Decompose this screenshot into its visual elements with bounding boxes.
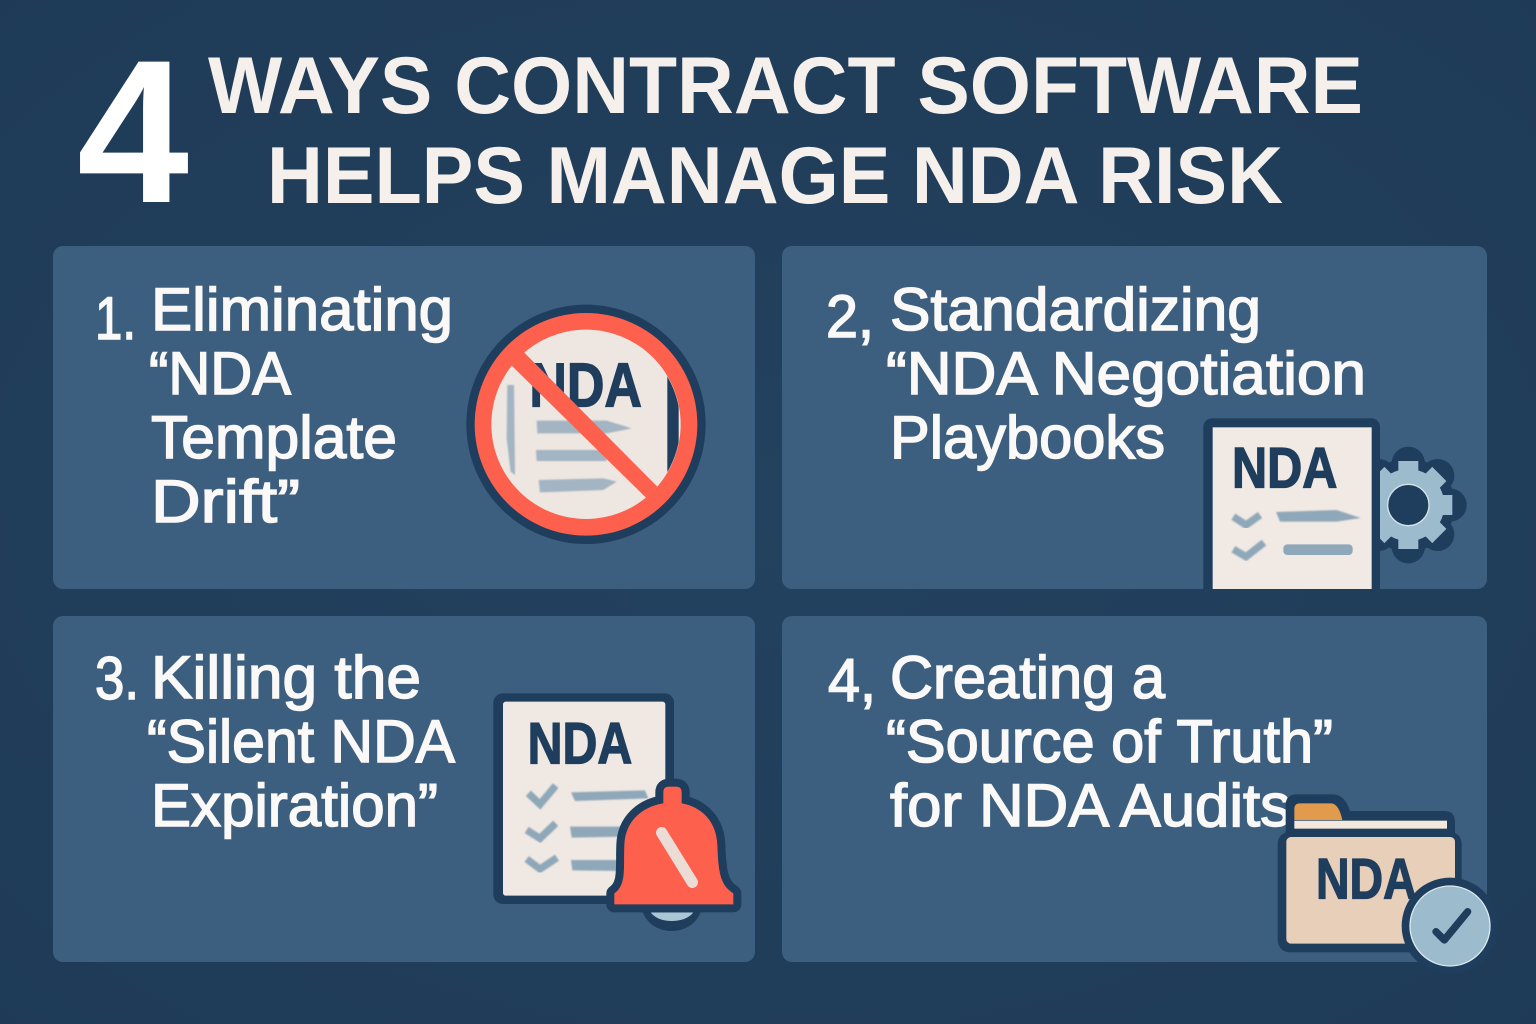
check badge [1402,878,1498,974]
bell clapper [642,908,702,931]
icon: NDA playbook document with gear [1203,418,1455,598]
panel 3 heading: Expiration” [151,772,438,839]
title numeral: 4 [77,18,189,246]
panel 2 heading: “NDA Negotiation [886,340,1366,407]
number 1: 1. [95,285,136,352]
panel 3 heading [147,644,455,839]
panel 4 heading: for NDA Audits [890,772,1291,839]
title line 1: WAYS CONTRACT SOFTWARE [208,41,1363,131]
panel 4 heading [886,644,1333,839]
panel 1 heading: Template [151,404,397,471]
panel 1 heading: Drift” [151,468,300,535]
panel 2 heading: Standardizing [890,276,1261,343]
panel 4 heading: Creating a [890,644,1166,711]
panel 3: killing the silent NDA expiration [53,616,755,962]
panel 1 heading: Eliminating [151,276,453,343]
icon: prohibited NDA document: NDA [529,352,642,421]
panel 2 heading [886,276,1366,471]
icon: NDA playbook document with gear: NDA [1232,437,1337,501]
number 3: 3. [95,645,139,712]
gear [1362,458,1455,552]
panel 2: standardizing NDA negotiation playbooks [782,246,1487,598]
panel 1: eliminating NDA template drift [53,246,755,589]
panel 2 heading: Playbooks [890,404,1165,471]
panel 3 heading: “Silent NDA [147,708,455,775]
icon: prohibited NDA document [466,305,706,544]
title [77,18,1363,246]
panel 3 heading: Killing the [151,644,421,711]
icon: NDA folder with check badge: NDA [1316,847,1417,911]
icon: NDA folder with check badge [1278,794,1498,974]
bell body [614,787,733,904]
panel 1 heading [149,276,453,535]
icon: NDA document with alert bell [493,693,733,931]
panel 1 heading: “NDA [149,340,291,407]
title line 2: HELPS MANAGE NDA RISK [267,131,1283,221]
panel 4 heading: “Source of Truth” [886,708,1333,775]
number 4: 4, [828,647,876,714]
panel 4: creating a source of truth for NDA audits [782,616,1498,974]
icon: NDA document with alert bell: NDA [528,713,632,777]
number 2: 2, [826,283,874,350]
